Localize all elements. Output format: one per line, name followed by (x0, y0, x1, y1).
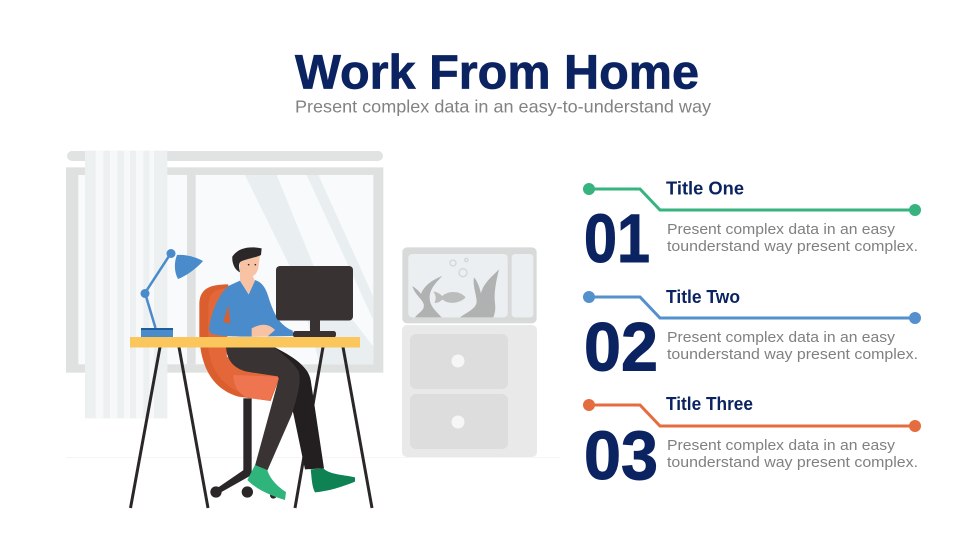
description one (667, 221, 918, 255)
connector: orange (583, 399, 921, 432)
description three (667, 437, 918, 471)
title two: Title Two (666, 287, 740, 307)
title three: Title Three (666, 394, 753, 414)
bubbles (450, 258, 468, 277)
description three: Present complex data in an easy (667, 437, 896, 454)
drawer cabinet (402, 325, 537, 457)
neck and head (240, 255, 260, 294)
description two (667, 329, 918, 363)
description two: Present complex data in an easy (667, 329, 896, 346)
desk top (130, 337, 360, 348)
curtain (85, 151, 167, 418)
near leg (226, 347, 300, 471)
description three: tounderstand way present complex. (667, 454, 918, 471)
curtain rod (67, 151, 383, 161)
eyes (248, 264, 249, 265)
description one: tounderstand way present complex. (667, 238, 918, 255)
hand (252, 325, 275, 337)
desk legs back (130, 347, 372, 508)
description one: Present complex data in an easy (667, 221, 896, 238)
title one: Title One (666, 178, 744, 198)
connector: blue (583, 291, 921, 324)
number 02: 02 (584, 308, 658, 386)
description two: tounderstand way present complex. (667, 346, 918, 363)
near sock (247, 465, 286, 500)
plant right (460, 269, 499, 317)
item 01 (583, 178, 921, 277)
title: Work From Home (295, 46, 699, 100)
hair (232, 247, 262, 272)
fish (433, 292, 466, 303)
far leg (273, 347, 324, 469)
monitor (276, 266, 353, 338)
item 03 (583, 394, 921, 494)
person (209, 247, 355, 500)
aquarium cabinet (402, 247, 537, 323)
arm gap (223, 305, 230, 323)
illustration: home office scene (66, 151, 560, 508)
window (66, 167, 383, 373)
subtitle: Present complex data in an easy-to-understand way (295, 96, 711, 116)
plant left (412, 276, 442, 317)
chair (199, 284, 280, 499)
number 01: 01 (584, 200, 650, 277)
desk lamp (140, 249, 203, 337)
number 03: 03 (584, 417, 658, 494)
far sock (311, 468, 355, 492)
floor line (66, 457, 560, 458)
torso and arm (209, 280, 293, 337)
connector: green (583, 183, 921, 216)
item 02 (583, 287, 921, 386)
